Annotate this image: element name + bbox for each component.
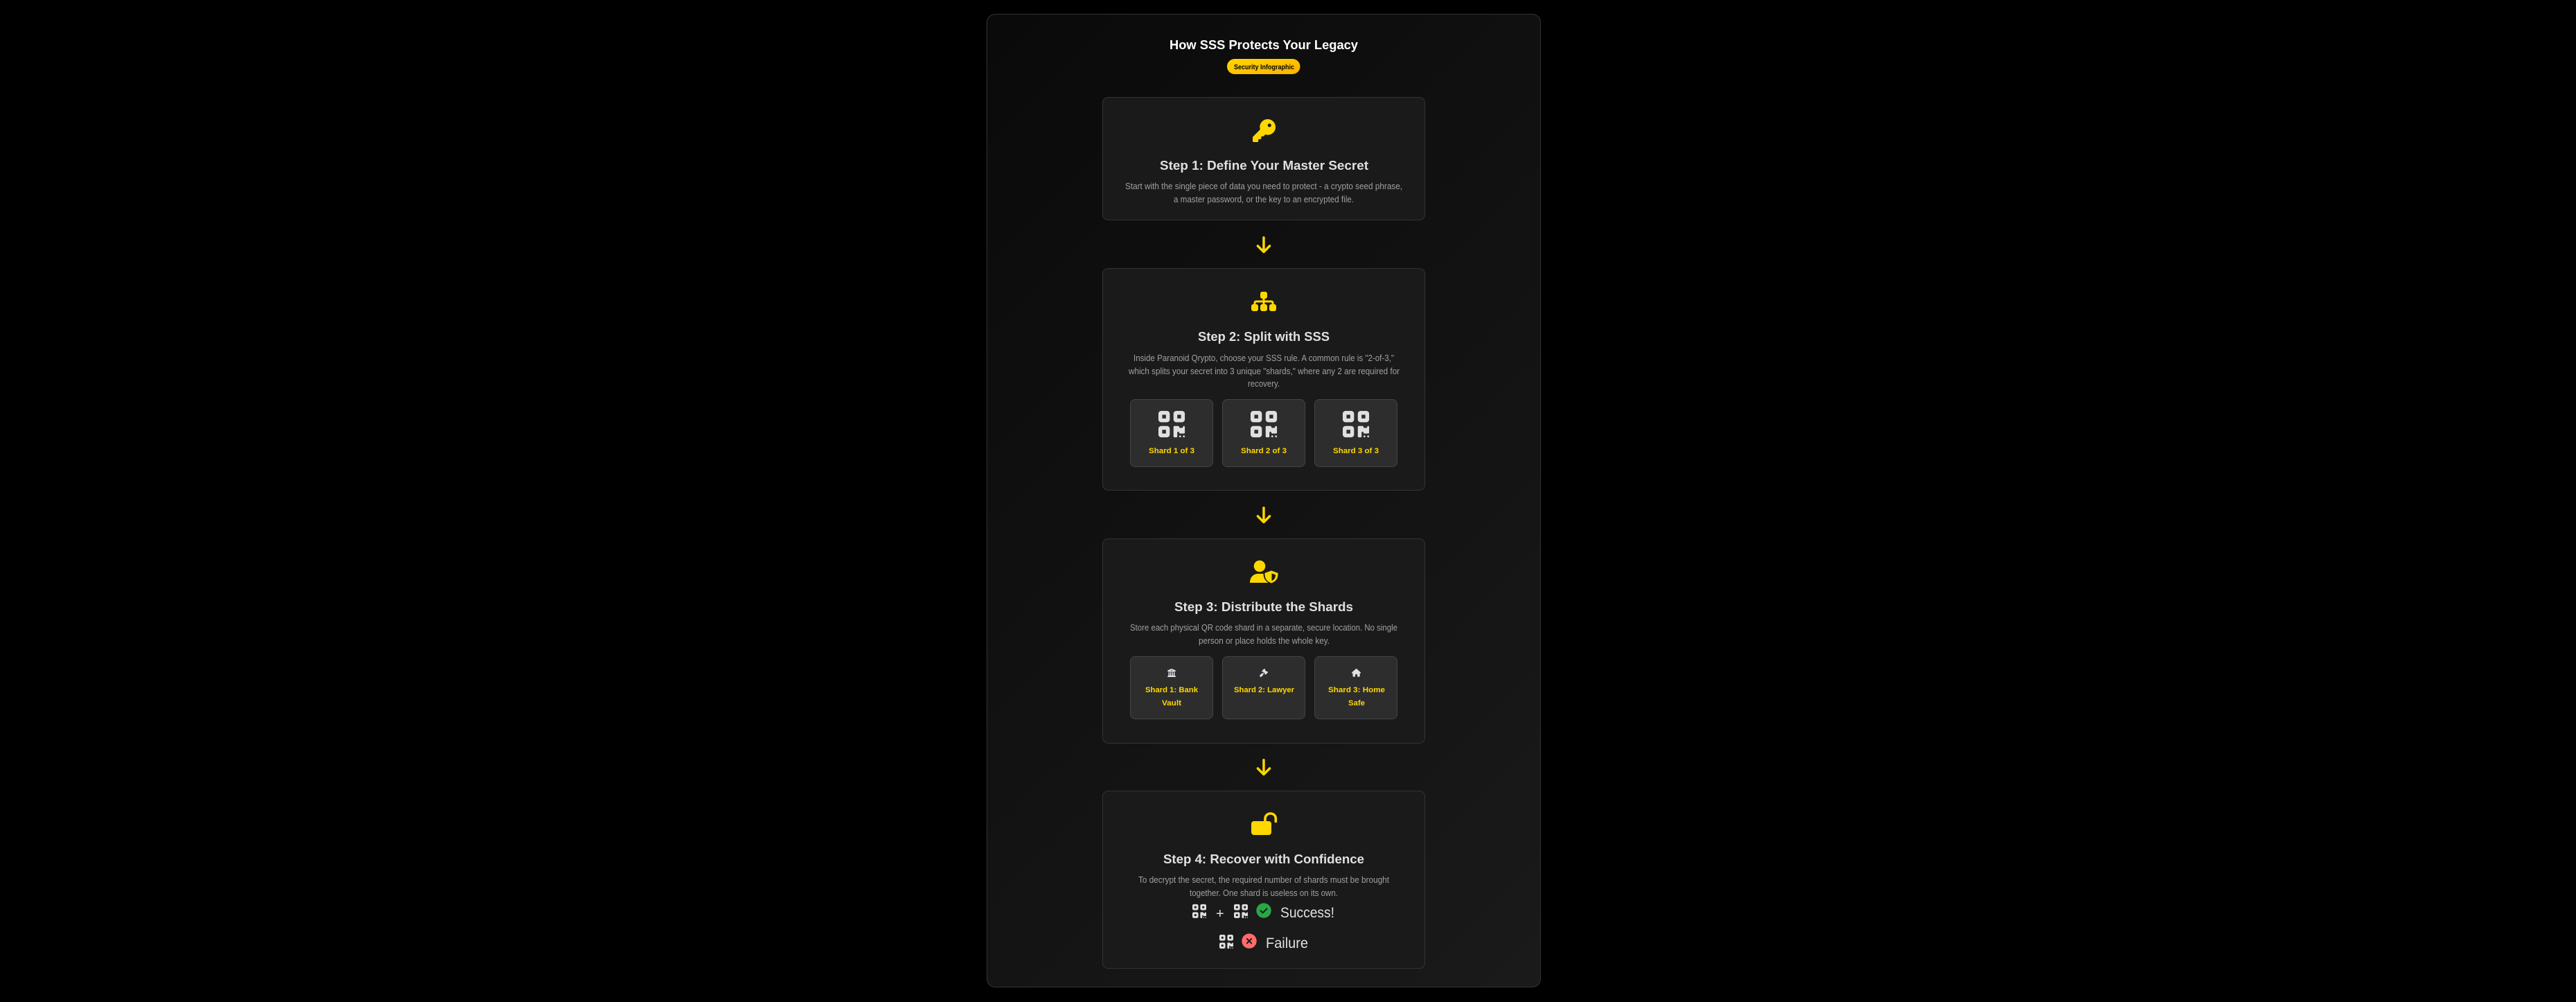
description: step 4: together. One shard is useless on its own. — [1190, 888, 1338, 898]
label: success: Success! — [1280, 905, 1334, 921]
label: shard 3 home safe: Safe — [1348, 699, 1365, 707]
shard 1 of 3 — [1131, 399, 1212, 467]
description: step 1 — [1125, 182, 1402, 204]
label: shard 1 bank vault — [1145, 686, 1199, 707]
plus sign: + — [1216, 906, 1224, 922]
icon: red cross — [1242, 933, 1257, 949]
shard 3 of 3 — [1315, 399, 1397, 467]
icon: qr code — [1234, 904, 1248, 918]
badge: security infographic: Security Infographic — [1234, 63, 1294, 71]
icon: qr code — [1192, 904, 1206, 918]
description: step 1: Start with the single piece of data you need to protect - a crypto seed phrase, — [1125, 182, 1402, 191]
icon: bank — [1167, 669, 1176, 677]
icon: qr code — [1219, 935, 1233, 949]
description: step 2: Inside Paranoid Qrypto, choose your SSS rule. A common rule is "2-of-3," — [1133, 353, 1394, 363]
heading: step 1: Step 1: Define Your Master Secret — [1160, 158, 1368, 173]
icon: house — [1352, 669, 1361, 677]
description: step 2: recovery. — [1248, 379, 1280, 389]
description: step 4 — [1138, 875, 1389, 898]
icon: sitemap — [1251, 292, 1276, 311]
panel: step 1 — [1103, 97, 1424, 220]
icon: key — [1253, 119, 1276, 142]
label: shard 1 bank vault: Shard 1: Bank — [1145, 686, 1199, 694]
description: step 4: To decrypt the secret, the required number of shards must be brought — [1138, 875, 1389, 885]
label: shard 2 lawyer: Shard 2: Lawyer — [1234, 686, 1295, 694]
heading: step 3: Step 3: Distribute the Shards — [1174, 599, 1353, 614]
label: shard 3 of 3: Shard 3 of 3 — [1333, 447, 1379, 455]
heading: step 2: Step 2: Split with SSS — [1198, 329, 1330, 344]
shard 3: home safe — [1315, 657, 1397, 719]
badge: security infographic — [1227, 59, 1300, 74]
description: step 3: Store each physical QR code shard in a separate, secure location. No single — [1130, 623, 1397, 633]
label: failure: Failure — [1266, 935, 1308, 951]
icon: qr code — [1343, 411, 1369, 437]
shard 1: bank vault — [1131, 657, 1212, 719]
arrow: step 3 to step 4 — [1257, 759, 1271, 775]
failure row — [1219, 933, 1308, 951]
description: step 1: a master password, or the key to an encrypted file. — [1174, 195, 1354, 204]
label: shard 3 home safe — [1328, 686, 1385, 707]
label: shard 1 of 3: Shard 1 of 3 — [1149, 447, 1194, 455]
title: How SSS Protects Your Legacy — [1170, 37, 1359, 52]
label: shard 1 bank vault: Vault — [1162, 699, 1181, 707]
panel: step 4 — [1103, 791, 1424, 969]
arrow: step 1 to step 2 — [1257, 236, 1271, 253]
panel: step 2 — [1103, 269, 1424, 491]
description: step 3 — [1130, 623, 1397, 646]
main card — [987, 14, 1541, 987]
description: step 2 — [1128, 353, 1400, 389]
icon: open lock — [1251, 814, 1276, 835]
shard 2: lawyer — [1222, 657, 1305, 719]
icon: qr code — [1251, 411, 1277, 437]
icon: qr code — [1158, 411, 1185, 437]
icon: gavel — [1260, 669, 1268, 677]
label: shard 3 home safe: Shard 3: Home — [1328, 686, 1385, 694]
icon: user with shield — [1250, 561, 1280, 584]
success row — [1192, 903, 1334, 922]
description: step 3: person or place holds the whole key. — [1199, 636, 1330, 646]
label: shard 2 of 3: Shard 2 of 3 — [1241, 447, 1287, 455]
shard 2 of 3 — [1222, 399, 1305, 467]
arrow: step 2 to step 3 — [1257, 507, 1271, 523]
panel: step 3 — [1103, 539, 1424, 743]
heading: step 4: Step 4: Recover with Confidence — [1163, 852, 1364, 866]
description: step 2: which splits your secret into 3 unique "shards," where any 2 are required for — [1128, 367, 1400, 376]
icon: green check — [1256, 903, 1271, 918]
